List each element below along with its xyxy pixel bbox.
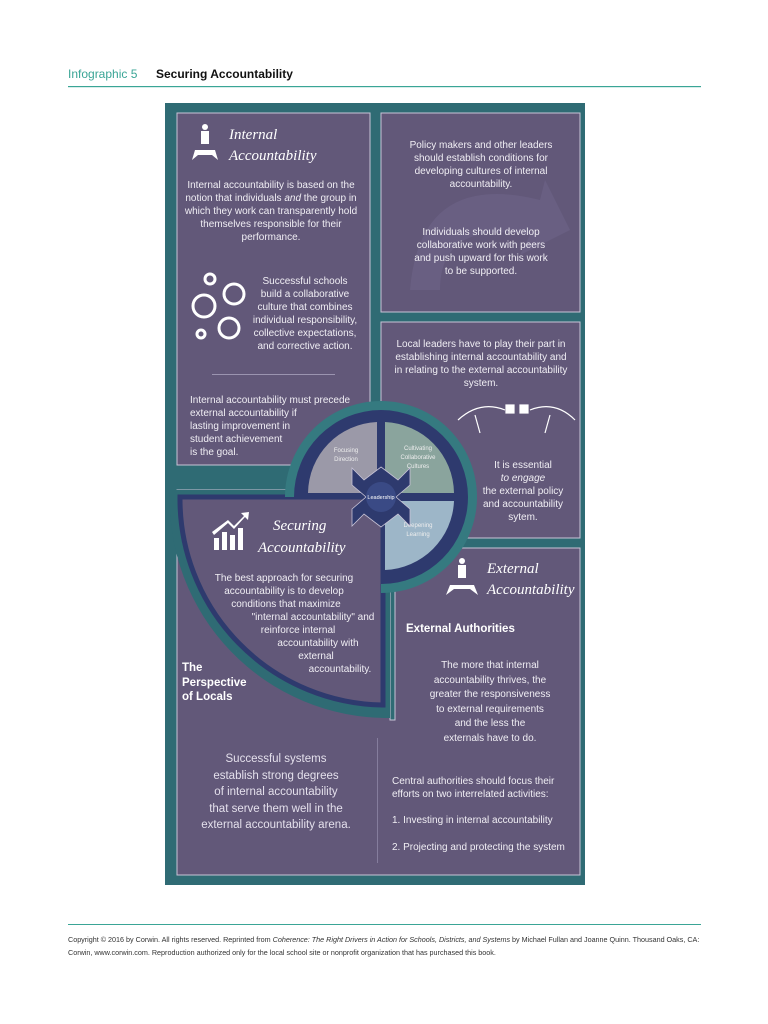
icon: person internal [192,124,218,160]
panel: policy makers: accountability. [450,179,512,190]
panel: internal accountability [177,113,370,465]
panel: bottom perspective of locals: and the less the [455,718,526,729]
text: successful schools: individual responsibility, [253,315,357,326]
panel: bottom perspective of locals: 2. Projecting and protecting the system [392,842,565,853]
panel: policy makers: to be supported. [445,266,517,277]
diagram: leadership circle [285,401,477,593]
quarter: securing accountability: "internal accountability" and [252,612,374,623]
heading: perspective of locals: The [182,662,202,674]
panel: bottom perspective of locals: externals have to do. [444,733,536,744]
quarter: securing accountability: external [298,651,334,662]
text: internal definition [184,180,357,243]
text: internal definition: themselves responsible for their [200,219,342,230]
text: successful schools: culture that combines [257,302,353,313]
text: successful systems: external accountability arena. [201,819,351,831]
heading: external authorities: External Authorities [406,623,515,635]
panel: local leaders: to engage [501,473,546,484]
panel: local leaders: system. [464,378,498,389]
footer: Copyright © 2016 by Corwin. All rights reserved. Reprinted from Coherence: The Right Drivers in Action for Schools, Districts, and Systems by Michael Fullan and Joanne Quinn. Thousand Oaks, CA: [68,935,699,944]
panel: bottom perspective of locals: accountability thrives, the [434,675,547,686]
header [68,67,701,87]
heading: perspective of locals: of Locals [182,691,232,703]
text: must precede: lasting improvement in [190,421,290,432]
panel: local leaders: Local leaders have to play their part in [396,339,566,350]
background panel [165,103,585,885]
heading: perspective of locals [182,662,247,703]
footer [68,924,701,957]
text: successful schools: and corrective action. [257,341,353,352]
panel: policy makers: and push upward for this work [414,253,549,264]
header: Securing Accountability [156,67,293,81]
panel: policy makers: Individuals should develop [422,227,540,238]
text: successful schools [253,276,357,352]
quarter: securing accountability: accountability with [277,638,359,649]
diagram: leadership circle: Leadership [367,495,395,501]
diagram: leadership circle: Deepening [403,523,433,529]
heading: internal accountability: Internal [228,127,277,143]
text: successful schools: collective expectations, [254,328,356,339]
diagram: leadership circle: Learning [406,532,430,538]
panel: bottom perspective of locals: Central authorities should focus their [392,776,555,787]
text: internal definition: notion that individuals and the group in [185,193,357,204]
panel: bottom perspective of locals: Accountability [486,582,575,598]
quarter: securing accountability: accountability. [309,664,371,675]
text: must precede: external accountability if [190,408,297,419]
panel: policy makers: collaborative work with peers [417,240,545,251]
panel: bottom perspective of locals: greater the responsiveness [430,689,550,700]
text: must precede: student achievement [190,434,283,445]
quarter: securing accountability: The best approach for securing [215,573,353,584]
heading: perspective of locals: Perspective [182,677,247,689]
icon: chart [212,512,249,550]
text: must precede [190,395,351,458]
panel: local leaders: in relating to the external accountability [395,365,567,376]
panel: policy makers: Policy makers and other leaders [410,140,552,151]
text: successful schools: build a collaborative [261,289,350,300]
icon: puzzle hands [458,405,575,433]
text: internal definition: Internal accountability is based on the [187,180,355,191]
footer: Corwin, www.corwin.com. Reproduction authorized only for the local school site or nonprofit organization that has purchased this book. [68,948,496,957]
text: internal definition: performance. [242,232,300,243]
text: successful schools: Successful schools [262,276,348,287]
heading: internal accountability: Accountability [228,148,317,164]
text: must precede: Internal accountability must precede [190,395,351,406]
panel: bottom perspective of locals: to external requirements [436,704,544,715]
text: internal definition: which they work can transparently hold [184,206,357,217]
text: successful systems [201,753,351,831]
heading: internal accountability [228,127,317,164]
diagram: leadership circle: Focusing [334,448,358,454]
text: successful systems: that serve them well in the [209,803,343,815]
panel: bottom perspective of locals [170,490,580,875]
quarter: securing accountability: accountability is to develop [224,586,344,597]
icon: gears [193,274,244,338]
text: successful systems: of internal accountability [214,786,338,798]
panel: bottom perspective of locals: External [486,561,539,577]
diagram: leadership circle: Cultivating [404,446,432,452]
text: must precede: is the goal. [190,447,238,458]
panel: policy makers: developing cultures of internal [415,166,547,177]
panel: local leaders: It is essential [494,460,552,471]
panel: local leaders: the external policy [483,486,563,497]
quarter: securing accountability [170,490,390,718]
header: Infographic 5 [68,67,138,81]
panel: local leaders: and accountability [483,499,563,510]
quarter: securing accountability: Securing [273,518,327,534]
quarter: securing accountability: conditions that maximize [231,599,341,610]
panel: bottom perspective of locals: The more that internal [441,660,539,671]
text: successful systems: establish strong degrees [213,770,339,782]
panel: local leaders: establishing internal accountability and [395,352,567,363]
panel: policy makers: should establish conditions for [414,153,549,164]
panel: local leaders [381,322,580,538]
quarter: securing accountability: reinforce internal [261,625,335,636]
quarter: securing accountability: Accountability [257,540,346,556]
text: successful systems: Successful systems [226,753,327,765]
diagram: leadership circle: Direction [334,457,358,463]
panel: policy makers [381,113,580,312]
diagram: leadership circle: Cultures [407,464,429,470]
icon: external person [446,558,478,595]
panel: bottom perspective of locals: efforts on two interrelated activities: [392,789,549,800]
panel: bottom perspective of locals: 1. Investing in internal accountability [392,815,553,826]
panel: local leaders: sytem. [508,512,538,523]
diagram: leadership circle: Collaborative [400,455,436,461]
